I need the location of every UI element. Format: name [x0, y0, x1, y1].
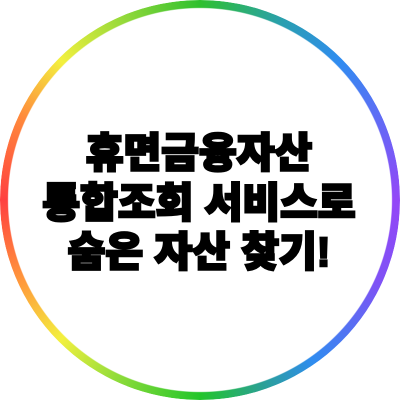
title — [42, 130, 356, 275]
title: 통합조회 서비스로 — [42, 180, 356, 226]
title: 휴면금융자산 — [86, 130, 312, 176]
title: 숨은 자산 찾기! — [68, 229, 330, 275]
